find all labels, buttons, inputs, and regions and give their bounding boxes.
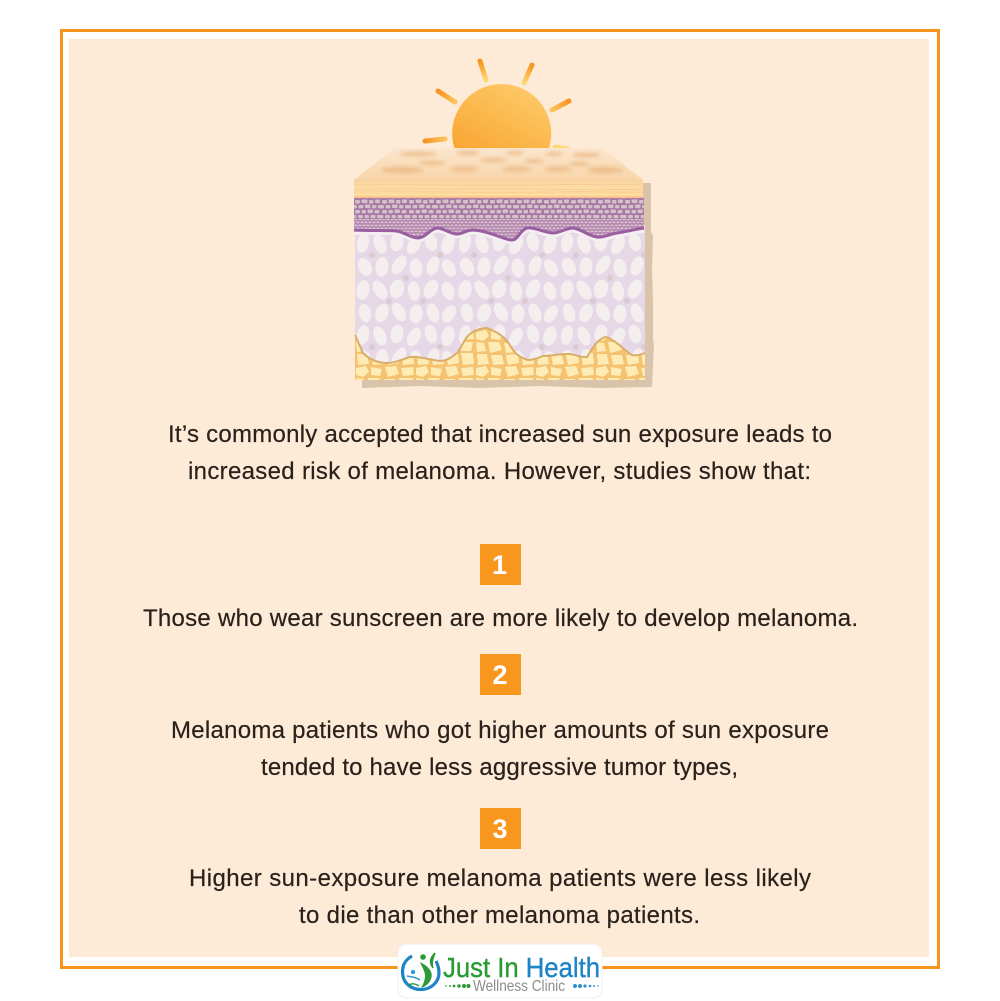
number badge 1: 1 <box>492 550 507 580</box>
point 3 text: to die than other melanoma patients. <box>299 902 700 929</box>
block shadow <box>362 183 654 388</box>
top skin layer <box>354 180 643 198</box>
fat layer edge <box>355 328 645 363</box>
point 3 text <box>189 865 811 929</box>
cream panel <box>69 39 929 957</box>
number badge 3: 3 <box>492 814 508 844</box>
skin block <box>354 148 654 388</box>
logo dots green <box>445 984 470 988</box>
logo subtitle: Wellness Clinic <box>473 978 565 995</box>
intro text <box>168 421 832 485</box>
number badge 2 <box>480 654 521 695</box>
point 2 text: tended to have less aggressive tumor types, <box>261 754 738 781</box>
point 3 text: Higher sun-exposure melanoma patients were less likely <box>189 865 811 892</box>
pale line under epidermis <box>354 231 644 243</box>
icon: sun <box>425 61 569 183</box>
point 1 text: Those who wear sunscreen are more likely to develop melanoma. <box>143 605 858 632</box>
dermis cells <box>355 225 645 363</box>
intro text: It’s commonly accepted that increased sun exposure leads to <box>168 421 832 448</box>
icon: logo emblem <box>402 953 439 990</box>
intro text: increased risk of melanoma. However, studies show that: <box>188 458 811 485</box>
number badge 1 <box>480 544 521 585</box>
point 2 text <box>171 717 829 781</box>
fat layer <box>355 328 645 380</box>
number badge 2: 2 <box>492 660 508 690</box>
illustration: sun over skin cross-section <box>354 61 654 388</box>
number badge 3 <box>480 808 521 849</box>
logo: Just In Health Wellness Clinic <box>398 944 602 998</box>
point 2 text: Melanoma patients who got higher amounts of sun exposure <box>171 717 829 744</box>
logo name: Just In Health <box>443 952 600 983</box>
skin surface <box>354 148 643 180</box>
epidermis purple layer <box>354 198 644 240</box>
logo dots blue <box>573 984 599 988</box>
epidermis basal line <box>354 228 644 240</box>
epidermis fine cells <box>354 219 644 240</box>
